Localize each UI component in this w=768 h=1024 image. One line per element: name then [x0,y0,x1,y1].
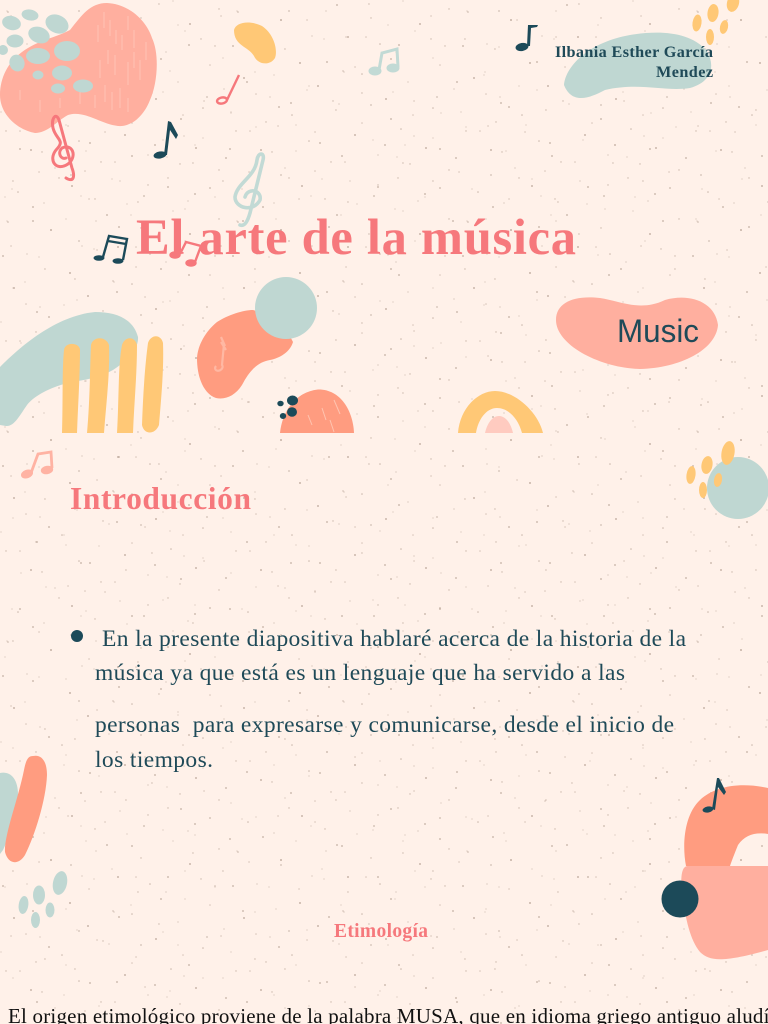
decoration: teal arc with yellow bars [0,312,163,433]
icon: teal beamed note [370,49,398,74]
icon: dark beamed note [94,236,127,264]
text block: introduction bullet: personas para expresarse y comunicarse, desde el inicio de [95,712,674,738]
text block: Music label [556,297,718,369]
icon: peach beamed note [22,452,52,478]
decoration: teal circle with yellow dots [685,440,768,519]
decoration: salmon blob with teal circle [197,277,317,398]
icon: red treble clef [53,116,74,180]
decoration: bottom-left strokes [0,756,47,862]
text block: introduction bullet: música ya que está es un lenguaje que ha servido a las [95,660,625,686]
decoration: bottom-right shapes [662,785,768,959]
icon: yellow blob [234,23,276,63]
icon: teal treble clef [235,154,263,225]
author name [555,43,713,81]
icon: red note [216,75,239,104]
text block: introduction bullet: los tiempos. [95,747,213,773]
author name: Mendez [656,63,713,81]
icon: dark note bottom right [702,778,726,813]
heading: Etimología: Etimología [334,921,428,942]
decoration: teal blob behind author [564,33,711,98]
bullet [71,630,83,642]
text block: introduction bullet [71,626,687,773]
icon: dark note [153,121,178,160]
decoration: top-left pink blob with teal spots [0,3,157,133]
decoration: rainbow [458,391,543,433]
icon: dark note top right [515,25,538,52]
title: El arte de la música [136,209,576,265]
decoration: yellow dots top right [691,0,741,45]
decoration: bottom-left teal dots [17,870,69,928]
decoration: salmon half dome with dark dots [277,389,354,433]
heading: Introducción: Introducción [70,481,251,516]
icon: red beamed note over title [170,242,201,266]
author name: Ilbania Esther García [555,43,713,61]
text block: Music label: Music [617,313,699,349]
text block: introduction bullet: En la presente diapositiva hablaré acerca de la historia de la [102,626,687,652]
